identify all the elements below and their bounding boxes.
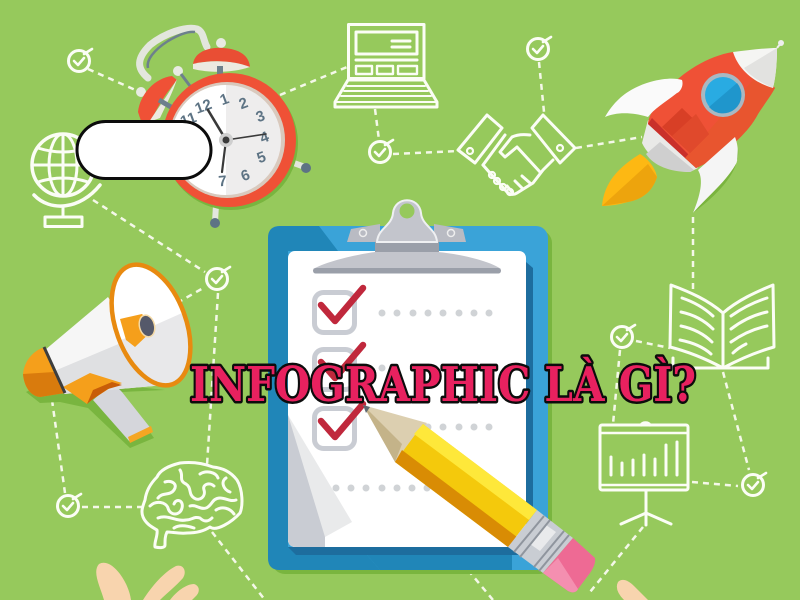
clock numerals: 6 <box>239 166 252 185</box>
clock handle <box>140 28 207 78</box>
clipboard <box>268 200 552 574</box>
rocket hull <box>648 52 775 168</box>
icon: alarm clock <box>136 28 311 228</box>
icon: check marker below laptop <box>370 140 393 162</box>
clock numerals: 4 <box>258 128 272 147</box>
icon: check marker above handshake <box>528 37 551 60</box>
icon: handshake <box>458 115 575 195</box>
pencil eraser <box>543 538 595 592</box>
icon: check marker beside book <box>612 325 635 348</box>
icon: check marker top left <box>68 49 92 72</box>
icon: open book <box>670 285 774 368</box>
dotted text rows <box>332 310 492 492</box>
megaphone shadow <box>26 384 165 448</box>
clock numerals: 12 <box>193 96 214 118</box>
megaphone driver <box>120 314 155 347</box>
check marks <box>321 288 363 437</box>
rocket hatch <box>662 108 709 153</box>
paper <box>288 251 526 547</box>
dashed connector network <box>52 62 749 600</box>
clock numerals <box>178 90 272 190</box>
icon: rocket <box>602 40 784 213</box>
clock body <box>164 76 298 210</box>
icon: presentation chart <box>600 423 688 525</box>
clock hands <box>208 110 266 172</box>
icon: globe <box>32 134 100 226</box>
rocket nose cone <box>733 48 777 88</box>
clock numerals: 3 <box>254 107 267 126</box>
rocket upper fin <box>605 79 683 117</box>
icon: right hand finger <box>617 580 648 600</box>
icon: check marker beside megaphone <box>206 267 230 290</box>
pencil body <box>395 424 537 547</box>
title: INFOGRAPHIC LÀ GÌ? <box>190 356 696 413</box>
rocket porthole <box>701 73 745 117</box>
clock numerals: 7 <box>218 173 228 190</box>
board <box>272 230 552 574</box>
megaphone cone <box>45 297 165 394</box>
clock numerals: 1 <box>218 90 231 109</box>
checkboxes <box>314 292 354 448</box>
icon: check marker beside brain <box>58 494 81 516</box>
clock numerals: 2 <box>237 94 250 113</box>
pencil wood tip <box>363 405 427 462</box>
icon: left hand fingers <box>96 563 199 600</box>
rocket exhaust collar <box>642 120 698 172</box>
icon: pencil <box>363 405 595 592</box>
icon: laptop <box>335 24 437 107</box>
folded corner <box>288 415 352 547</box>
pencil ferrule <box>508 510 573 573</box>
rocket flame <box>602 154 657 206</box>
clock numerals: 11 <box>178 109 199 130</box>
megaphone bell <box>97 254 205 396</box>
paper shadow <box>288 262 533 555</box>
megaphone trigger <box>63 373 122 404</box>
clock feet <box>215 205 216 222</box>
icon: megaphone <box>23 262 193 448</box>
white pill label <box>77 122 211 178</box>
rocket lower fin <box>693 137 738 213</box>
clip <box>313 252 501 269</box>
megaphone back cap <box>23 348 65 397</box>
megaphone handle <box>93 383 152 442</box>
clock bells <box>216 38 226 48</box>
clock numerals: 5 <box>255 148 268 167</box>
icon: brain <box>142 462 242 548</box>
icon: check marker beside chart <box>742 473 766 496</box>
